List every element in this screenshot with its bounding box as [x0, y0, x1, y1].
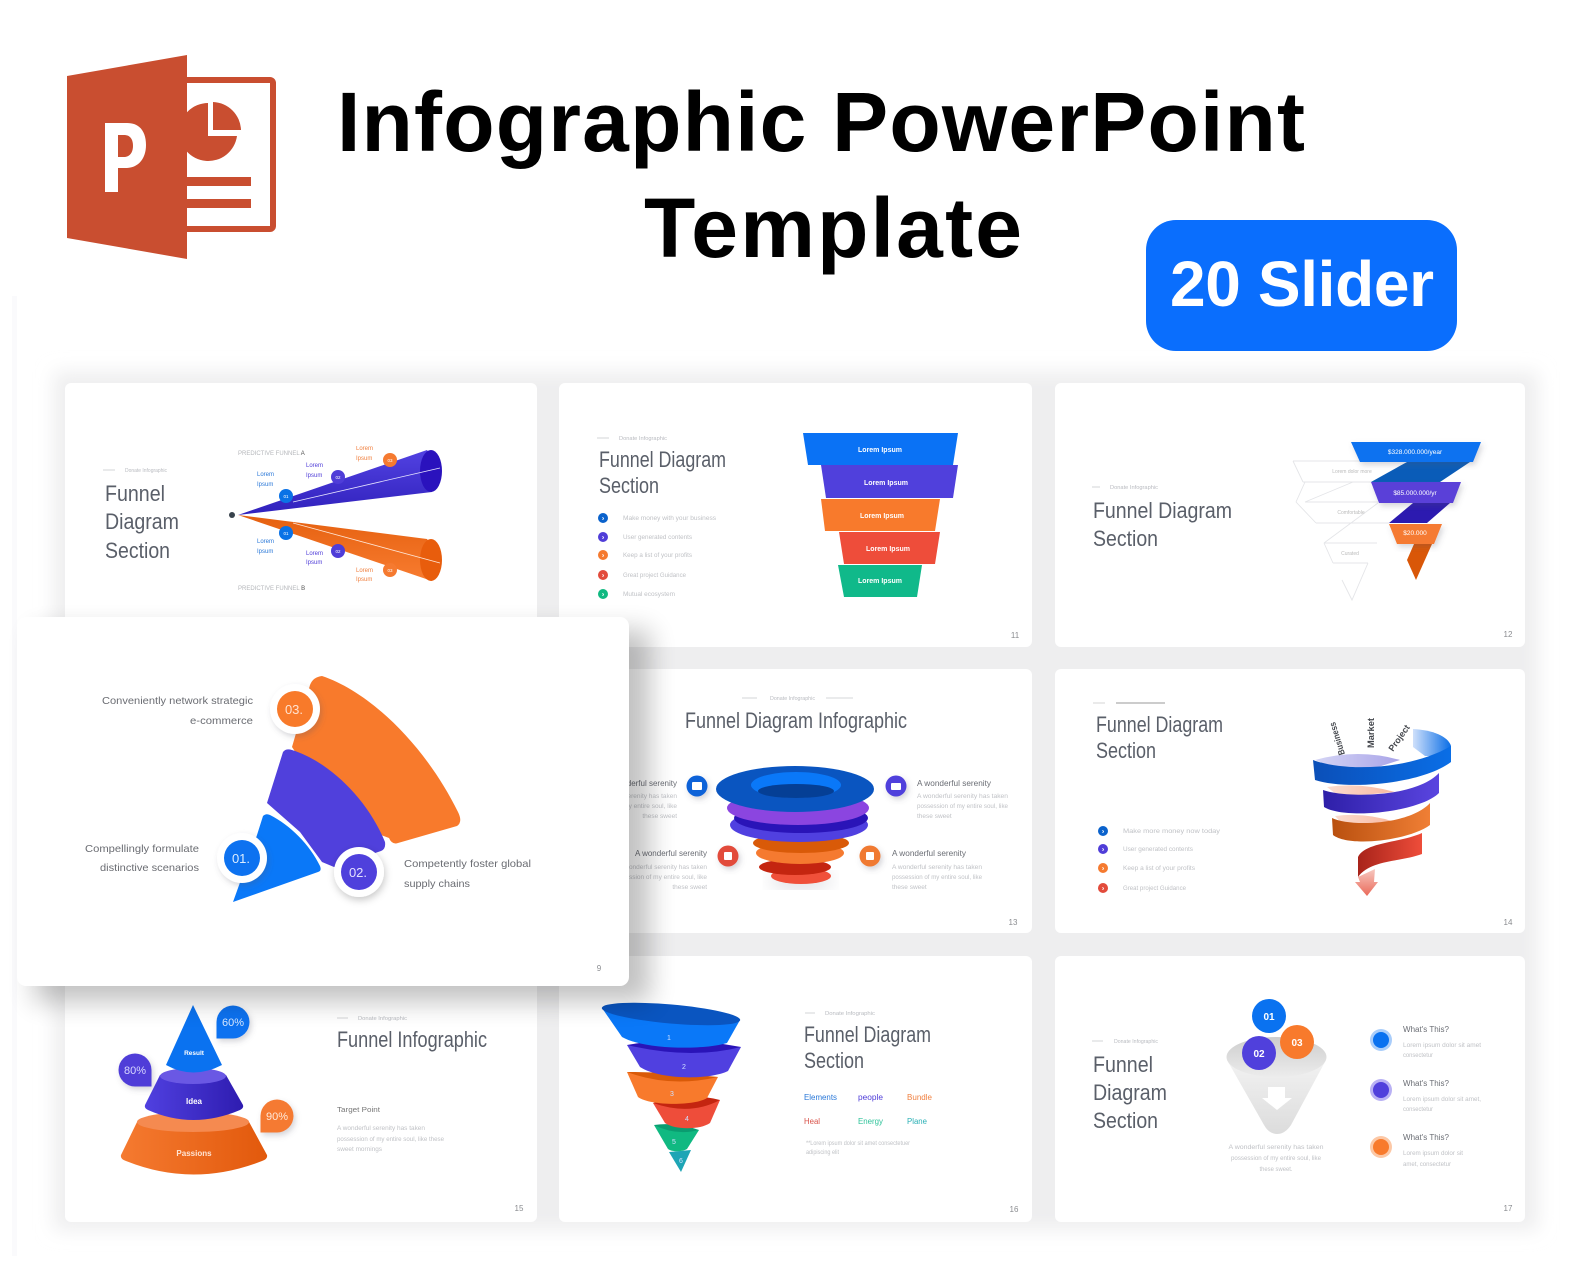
page number: 9 — [597, 964, 602, 973]
cone labels — [238, 446, 373, 592]
chart: zigzag funnel: $85.000.000/yr — [1393, 490, 1438, 497]
colored keyword grid: Energy — [858, 1117, 883, 1126]
list item 02 — [1370, 1079, 1481, 1113]
heading: Section — [599, 473, 659, 498]
badge: 20 Slider — [1146, 220, 1457, 351]
cone labels: Lorem — [356, 446, 373, 452]
numbered ball 03 — [1280, 1025, 1314, 1059]
chart: six tier funnel: 2 — [682, 1064, 686, 1071]
ghost funnel outline — [1293, 461, 1407, 600]
cone labels: Lorem — [257, 472, 274, 478]
bullet list: Great project Guidance — [623, 572, 686, 579]
badge 03 — [270, 684, 320, 734]
badge 03: 03. — [285, 702, 303, 717]
ghost labels: Comfortable — [1337, 510, 1365, 516]
heading: Funnel Diagram — [1096, 712, 1223, 737]
heading: Section — [1096, 738, 1156, 763]
callout: 60 percent: 60% — [222, 1017, 244, 1029]
page number: 12 — [1504, 630, 1513, 639]
cone labels: Ipsum — [306, 560, 322, 566]
colored keyword grid: Heal — [804, 1117, 820, 1126]
ghost labels — [1332, 469, 1372, 557]
bullet list: Keep a list of your profits — [1123, 865, 1196, 872]
cone labels: Lorem — [257, 539, 274, 545]
funnel segment: orange — [292, 676, 460, 843]
panel: featured slide 9 — [17, 617, 650, 1002]
cone labels: Ipsum — [257, 482, 273, 488]
step markers — [279, 453, 397, 577]
chart: zigzag funnel: $20.000 — [1403, 530, 1427, 537]
chart: six tier funnel: 1 — [667, 1035, 671, 1042]
list item 02: Lorem ipsum dolor sit amet, — [1403, 1096, 1481, 1103]
caption — [1228, 1144, 1324, 1173]
footnote — [806, 1140, 911, 1156]
text block: top right: these sweet — [917, 813, 952, 820]
text block: 03 — [102, 695, 253, 727]
footnote: adipiscing elit — [806, 1149, 839, 1156]
badge 01: 01. — [232, 851, 250, 866]
heading: Section — [105, 538, 170, 563]
heading: Funnel Infographic — [337, 1027, 487, 1052]
heading — [599, 447, 726, 498]
text block: bottom left: A wonderful serenity has taken — [618, 864, 707, 871]
apex dot — [229, 512, 235, 518]
heading — [1093, 498, 1232, 551]
text block: top right: possession of my entire soul, like — [917, 803, 1008, 810]
text block: 01: Compellingly formulate — [85, 843, 199, 855]
heading: Section — [1093, 526, 1158, 551]
eyebrow — [337, 1016, 408, 1022]
heading — [1093, 1052, 1167, 1133]
colored keyword grid: people — [858, 1093, 884, 1102]
heading: Section — [1093, 1108, 1158, 1133]
panel: slide 14 spiral funnel — [1055, 669, 1525, 933]
chart: blue result tier — [166, 1005, 222, 1072]
bullet list: Mutual ecosystem — [623, 591, 675, 598]
chart: orange passions tier — [121, 1112, 267, 1174]
text block: 01 — [85, 843, 199, 874]
page number: 11 — [1011, 631, 1020, 640]
chart: purple idea tier — [145, 1068, 243, 1120]
heading — [1096, 712, 1223, 763]
caption: these sweet. — [1260, 1166, 1293, 1173]
chart: stacked ellipses funnel — [716, 766, 874, 888]
page number: 14 — [1504, 918, 1513, 927]
funnel labels: Market — [1366, 718, 1376, 748]
eyebrow — [805, 1011, 876, 1017]
ghost labels: Lorem dolor more — [1332, 469, 1372, 475]
cone labels: Lorem — [306, 551, 323, 557]
eyebrow — [742, 696, 853, 702]
text block: top right: A wonderful serenity has taken — [917, 793, 1008, 800]
funnel segment: blue — [233, 814, 321, 902]
cone labels: PREDICTIVE FUNNEL B — [238, 586, 305, 592]
numbered ball 01 — [1252, 999, 1286, 1033]
step markers: 03 — [387, 458, 393, 463]
colored keyword grid: Elements — [804, 1093, 837, 1102]
text block: 02: supply chains — [404, 878, 470, 890]
chart: upper cone — [238, 450, 442, 515]
text block: 03: e-commerce — [190, 715, 253, 727]
funnel labels: Project — [1386, 723, 1412, 753]
bullet list: › — [602, 534, 605, 542]
panel: slide 11 stacked funnel — [559, 383, 1032, 647]
list item 03 — [1370, 1133, 1463, 1168]
chart: five-step funnel: Lorem Ipsum — [860, 513, 904, 520]
icon: purple printer badge — [886, 776, 906, 796]
text block: bottom right: possession of my entire soul, like — [892, 874, 982, 881]
text block: bottom left: A wonderful serenity — [635, 849, 707, 858]
text block: bottom left — [612, 849, 707, 891]
funnel labels: Business — [1327, 721, 1347, 756]
text block: top right: A wonderful serenity — [917, 779, 991, 788]
bullet list: › — [1102, 886, 1105, 892]
heading — [105, 481, 179, 563]
chart: six tier funnel: 3 — [670, 1091, 674, 1098]
eyebrow: Donate Infographic — [358, 1016, 408, 1022]
bullet list: User generated contents — [623, 534, 693, 541]
step markers: 01 — [283, 494, 289, 499]
step markers: 03 — [387, 568, 393, 573]
bullet list: › — [1102, 866, 1105, 872]
eyebrow: Donate Infographic — [825, 1011, 876, 1017]
text block: top left: possession of my entire soul, like — [582, 803, 677, 810]
colored keyword grid — [804, 1093, 933, 1126]
chart: zigzag funnel: $328.000.000/year — [1388, 449, 1443, 456]
funnel segment: purple — [267, 749, 385, 867]
heading: Funnel Diagram Infographic — [685, 708, 907, 733]
tier labels: Idea — [186, 1097, 203, 1106]
callout: 90 percent — [260, 1100, 294, 1132]
eyebrow: Donate Infographic — [1114, 1039, 1159, 1045]
deck backdrop shadow — [12, 296, 1538, 1256]
text block: target point: sweet mornings — [337, 1146, 383, 1153]
page number: 15 — [515, 1204, 524, 1213]
icon: red badge — [718, 846, 738, 866]
badge: 20 Slider: 20 Slider — [1170, 248, 1434, 320]
eyebrow — [1092, 485, 1159, 491]
panel: slide 16 six tier funnel — [559, 956, 1032, 1222]
text block: bottom right: these sweet — [892, 884, 927, 891]
title — [337, 75, 1305, 275]
text block: 01: distinctive scenarios — [100, 862, 199, 874]
eyebrow: Donate Infographic — [125, 468, 167, 474]
bullet list: Keep a list of your profits — [623, 552, 693, 559]
text block: 02 — [404, 858, 531, 890]
heading: Funnel — [1093, 1052, 1153, 1077]
icon: PowerPoint logo — [67, 55, 273, 259]
text block: target point: possession of my entire soul, like these — [337, 1136, 444, 1143]
list item 03: What's This? — [1403, 1133, 1450, 1142]
callout: 80 percent: 80% — [124, 1065, 146, 1077]
cone labels: Lorem — [356, 568, 373, 574]
eyebrow: Donate Infographic — [770, 696, 816, 702]
text block: bottom left: possession of my entire soul, like — [612, 874, 707, 881]
icon: blue image badge — [686, 776, 708, 796]
text block: top right — [917, 779, 1008, 820]
badge 02: 02. — [349, 865, 367, 880]
text block: top left: these sweet — [642, 813, 677, 820]
panel: slide 15 cone pyramid — [65, 956, 537, 1222]
eyebrow — [103, 468, 167, 474]
text block: target point: A wonderful serenity has taken — [337, 1125, 425, 1132]
heading: Funnel Diagram — [804, 1022, 931, 1047]
bullet list: › — [1102, 846, 1105, 854]
callout: 90 percent: 90% — [266, 1111, 288, 1123]
bullet list: Great project Guidance — [1123, 885, 1186, 892]
cone labels: Ipsum — [306, 473, 322, 479]
panel: slide 12 zigzag funnel — [1055, 383, 1525, 647]
heading: Funnel Diagram — [599, 447, 726, 472]
text block: 02: Competently foster global — [404, 858, 531, 870]
step markers: 02 — [335, 549, 341, 554]
callout: 60 percent — [216, 1006, 250, 1038]
list item 02: What's This? — [1403, 1079, 1450, 1088]
heading: Diagram — [105, 509, 179, 534]
eyebrow: Donate Infographic — [1110, 485, 1159, 491]
title: Infographic PowerPoint — [337, 75, 1305, 169]
chart: six tier funnel: 6 — [679, 1158, 683, 1165]
text block: 03: Conveniently network strategic — [102, 695, 253, 707]
bullet list: › — [602, 592, 605, 598]
panel: slide 17 gray funnel with balls — [1055, 956, 1525, 1222]
badge 02 — [334, 847, 384, 897]
callout: 80 percent — [118, 1054, 152, 1086]
page number: 16 — [1010, 1205, 1019, 1214]
page number: 17 — [1504, 1204, 1513, 1213]
list item 01: Lorem ipsum dolor sit amet — [1403, 1042, 1481, 1049]
heading — [804, 1022, 931, 1073]
numbered ball 01: 01 — [1263, 1012, 1275, 1023]
chart: lower cone — [238, 515, 442, 581]
heading: Diagram — [1093, 1080, 1167, 1105]
chart: five-step funnel — [803, 433, 958, 597]
numbered ball 03: 03 — [1291, 1038, 1303, 1049]
bullet list: › — [602, 572, 605, 580]
panel: slide 13 layered funnel — [559, 669, 1032, 933]
list item 03: amet, consectetur — [1403, 1161, 1452, 1168]
text block: top left — [582, 779, 677, 820]
text block: bottom right: A wonderful serenity has taken — [892, 864, 982, 871]
title: Template — [644, 181, 1022, 275]
eyebrow — [1093, 702, 1165, 704]
icon: gray funnel — [1226, 1037, 1326, 1134]
text block: target point: Target Point — [337, 1107, 380, 1114]
numbered ball 02 — [1242, 1036, 1276, 1070]
eyebrow: Donate Infographic — [619, 436, 668, 442]
heading: Funnel Diagram — [1093, 498, 1232, 523]
colored keyword grid: Bundle — [907, 1093, 933, 1102]
cone labels: Ipsum — [257, 549, 273, 555]
caption: A wonderful serenity has taken — [1228, 1144, 1324, 1151]
bullet list: Make more money now today — [1123, 828, 1221, 835]
step markers: 01 — [283, 531, 289, 536]
list item 01 — [1370, 1025, 1481, 1059]
panel: slide 10 cone funnels — [65, 383, 537, 647]
heading: Section — [804, 1048, 864, 1073]
chart: five-step funnel: Lorem Ipsum — [864, 480, 908, 487]
step markers: 02 — [335, 475, 341, 480]
chart: five-step funnel: Lorem Ipsum — [858, 578, 902, 585]
text block: bottom right: A wonderful serenity — [892, 849, 966, 858]
tier labels: Result — [184, 1050, 205, 1057]
bullet list: › — [602, 552, 605, 560]
list item 01: consectetur — [1403, 1052, 1434, 1059]
chart: zigzag funnel — [1351, 442, 1481, 580]
page number: 13 — [1009, 918, 1018, 927]
chart: five-step funnel: Lorem Ipsum — [858, 447, 902, 454]
footnote: **Lorem ipsum dolor sit amet consectetuer — [806, 1140, 911, 1147]
chart: five-step funnel: Lorem Ipsum — [866, 546, 910, 553]
list item 03: Lorem ipsum dolor sit — [1403, 1150, 1463, 1157]
text block: top left: A wonderful serenity — [605, 779, 677, 788]
colored keyword grid: Plane — [907, 1117, 928, 1126]
numbered ball 02: 02 — [1253, 1049, 1265, 1060]
chart: six tier funnel — [601, 998, 741, 1172]
bullet list: User generated contents — [1123, 846, 1194, 853]
funnel labels — [1327, 718, 1412, 756]
chart: six tier funnel: 5 — [672, 1139, 676, 1146]
bullet list: › — [1102, 828, 1105, 836]
bullet list: › — [602, 516, 605, 522]
cone labels: Lorem — [306, 463, 323, 469]
bullet list — [1098, 826, 1221, 893]
tier labels — [176, 1050, 212, 1158]
list item 01: What's This? — [1403, 1025, 1450, 1034]
text block: target point — [337, 1107, 444, 1153]
bullet list: Make money with your business — [623, 515, 717, 522]
chart: spiral ribbon — [1313, 729, 1451, 896]
cone labels: Ipsum — [356, 456, 372, 462]
badge 01 — [217, 833, 267, 883]
cone labels: Ipsum — [356, 577, 372, 583]
text block: bottom left: these sweet — [672, 884, 707, 891]
text block: bottom right — [892, 849, 982, 891]
icon: orange badge — [860, 846, 880, 866]
heading: Funnel — [105, 481, 165, 506]
eyebrow — [1092, 1039, 1159, 1045]
eyebrow — [597, 436, 668, 442]
caption: possession of my entire soul, like — [1231, 1155, 1321, 1162]
list item 02: consectetur — [1403, 1106, 1434, 1113]
chart: six tier funnel: 4 — [685, 1116, 689, 1123]
text block: top left: A wonderful serenity has taken — [588, 793, 677, 800]
cone labels: PREDICTIVE FUNNEL A — [238, 451, 305, 457]
bullet list — [598, 513, 717, 599]
ghost labels: Curated — [1341, 551, 1359, 557]
tier labels: Passions — [176, 1149, 212, 1158]
